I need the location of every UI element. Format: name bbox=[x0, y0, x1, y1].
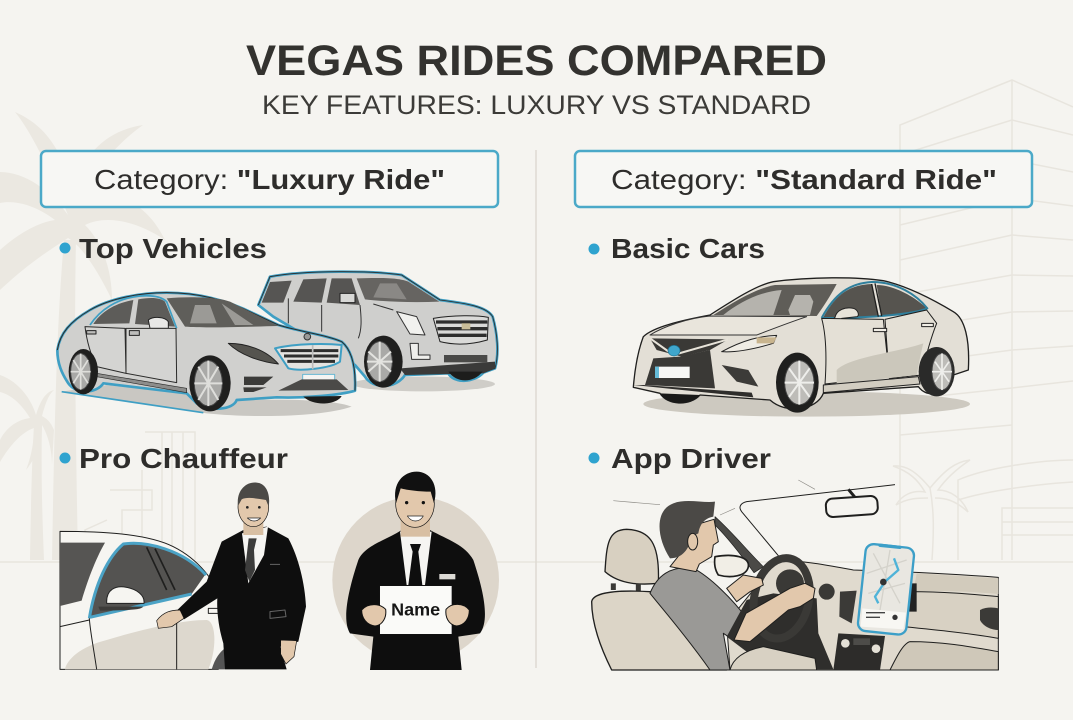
sedan bbox=[57, 293, 355, 416]
chauffeur standing bbox=[157, 483, 306, 669]
background: skyline and palms bbox=[0, 80, 1073, 562]
bullet heading: pro chauffeur: Pro Chauffeur bbox=[79, 443, 288, 474]
title: VEGAS RIDES COMPARED bbox=[246, 37, 827, 85]
driver arms and hands bbox=[727, 575, 815, 642]
category box: standard bbox=[575, 151, 1032, 207]
category box: standard: Category: "Standard Ride" bbox=[611, 164, 997, 195]
illustration: standard sedan bbox=[633, 278, 970, 417]
dashboard bbox=[715, 555, 998, 670]
phone with map route bbox=[857, 543, 917, 635]
SUV bbox=[258, 272, 497, 391]
windshield frame and mirror bbox=[613, 480, 895, 573]
bullet heading: basic cars: Basic Cars bbox=[611, 233, 765, 264]
bullet heading: app driver: App Driver bbox=[611, 443, 771, 474]
circle backdrop bbox=[332, 497, 499, 663]
illustration: luxury SUV and sedan bbox=[57, 272, 497, 416]
subtitle: KEY FEATURES: LUXURY VS STANDARD bbox=[262, 90, 811, 120]
center divider bbox=[535, 150, 537, 668]
steering column and wheel bbox=[727, 553, 835, 670]
panel: standard ride bbox=[575, 151, 1032, 670]
category box: luxury: Category: "Luxury Ride" bbox=[94, 164, 445, 195]
illustration: app driver in car interior bbox=[592, 480, 998, 670]
category box: luxury bbox=[41, 151, 498, 207]
chauffeur with name sign bbox=[346, 472, 485, 670]
driver seat bbox=[592, 529, 727, 670]
white car door bbox=[60, 531, 227, 669]
sign text: Name bbox=[391, 600, 440, 620]
bullet heading: top vehicles: Top Vehicles bbox=[79, 233, 267, 264]
illustration: chauffeur opening car door bbox=[60, 472, 499, 670]
driver torso and head bbox=[650, 501, 747, 670]
panel: luxury ride bbox=[41, 151, 499, 670]
